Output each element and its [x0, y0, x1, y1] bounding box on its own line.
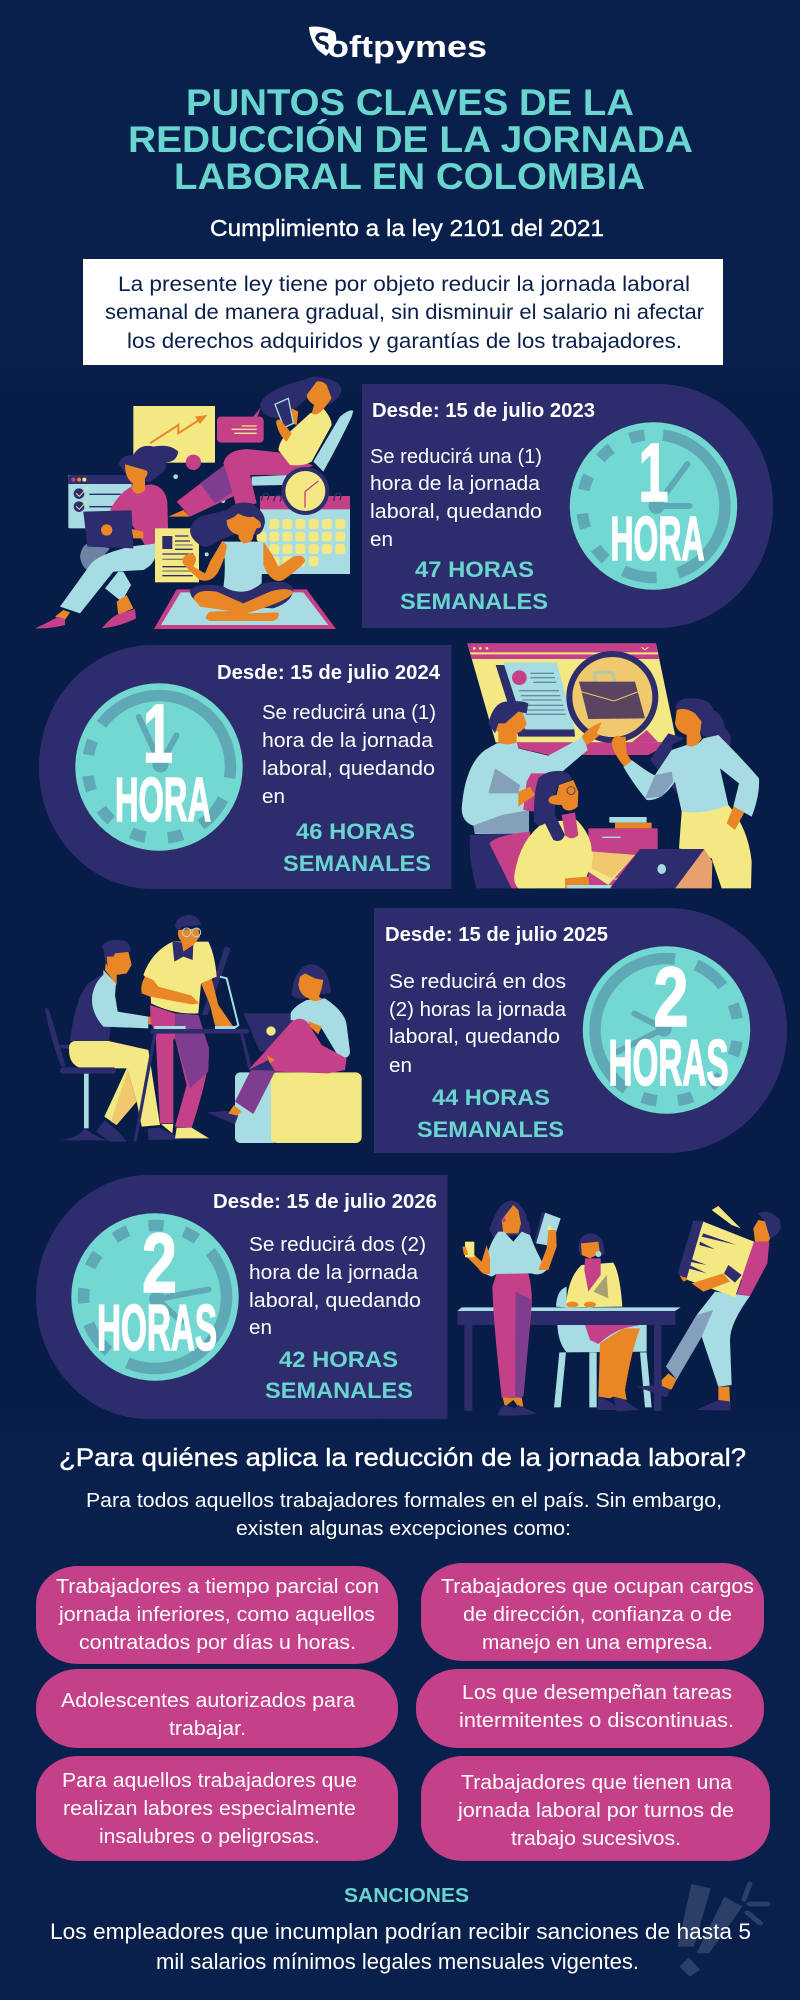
- description: (2) horas la jornada: [389, 999, 567, 1021]
- hours remaining: 46 HORAS: [296, 819, 415, 844]
- title: LABORAL EN COLOMBIA: [174, 156, 645, 197]
- pill: part time: Trabajadores a tiempo parcial con: [56, 1576, 379, 1598]
- pill: shift work: Trabajadores que tienen una: [461, 1772, 733, 1794]
- intro box: [83, 259, 723, 365]
- description: [389, 971, 567, 1077]
- icon: clock 2 horas: HORAS: [97, 1291, 217, 1364]
- sanctions text: [50, 1919, 751, 1974]
- hours remaining: SEMANALES: [283, 851, 431, 876]
- description: Se reducirá una (1): [370, 446, 542, 468]
- title: REDUCCIÓN DE LA JORNADA: [128, 118, 693, 160]
- description: en: [262, 786, 285, 808]
- hours remaining: SEMANALES: [417, 1117, 564, 1142]
- logo: Softpymes: oftpymes: [327, 29, 487, 64]
- pill: shift work: trabajo sucesivos.: [511, 1828, 681, 1850]
- pill: part time: [36, 1566, 398, 1664]
- pill: adolescents: Adolescentes autorizados para: [61, 1690, 356, 1712]
- hours remaining: 44 HORAS: [432, 1085, 550, 1110]
- icon: clock 1 hora: [570, 422, 737, 590]
- description: laboral, quedando: [389, 1026, 560, 1048]
- icon: exclamation marks: [678, 1883, 767, 1977]
- illustration: team around a magnifier and job screen: [462, 643, 759, 888]
- icon: clock 1 hora: HORA: [115, 766, 211, 835]
- description: [370, 446, 542, 551]
- intro text: Para todos aquellos trabajadores formales en el país. Sin embargo,: [86, 1490, 722, 1512]
- date: Desde: 15 de julio 2025: [385, 924, 608, 946]
- intro box: semanal de manera gradual, sin disminuir el salario ni afectar: [105, 301, 704, 324]
- icon: clock 2 horas: [41, 1183, 269, 1411]
- intro box: los derechos adquiridos y garantías de los trabajadores.: [127, 330, 682, 353]
- pill: adolescents: trabajar.: [169, 1718, 246, 1740]
- pill: unhealthy work: realizan labores especialmente: [63, 1798, 356, 1820]
- description: laboral, quedando: [249, 1290, 421, 1312]
- panel: 2025: [374, 908, 787, 1153]
- pill: shift work: jornada laboral por turnos de: [457, 1800, 734, 1822]
- panel: 2023: [362, 384, 773, 628]
- description: Se reducirá en dos: [389, 971, 566, 993]
- description: [262, 702, 436, 808]
- hours remaining: SEMANALES: [265, 1378, 413, 1403]
- hours remaining: [417, 1085, 564, 1142]
- pill: management: Trabajadores que ocupan cargos: [441, 1576, 754, 1598]
- description: hora de la jornada: [370, 473, 541, 495]
- date: Desde: 15 de julio 2024: [217, 662, 441, 684]
- sanctions text: Los empleadores que incumplan podrían recibir sanciones de hasta 5: [50, 1919, 751, 1944]
- date: Desde: 15 de julio 2026: [213, 1191, 437, 1213]
- icon: clock 1 hora: HORA: [610, 505, 704, 574]
- description: en: [389, 1055, 412, 1077]
- pill: intermittent tasks: Los que desempeñan tareas: [462, 1682, 732, 1704]
- title: PUNTOS CLAVES DE LA: [186, 82, 634, 123]
- intro text: [86, 1490, 722, 1540]
- description: hora de la jornada: [262, 730, 434, 752]
- pill: management: [421, 1563, 764, 1661]
- icon: clock 1 hora: 1: [143, 687, 173, 780]
- icon: clock 2 horas: [558, 921, 775, 1139]
- heading: sanctions: SANCIONES: [344, 1885, 469, 1907]
- date: Desde: 15 de julio 2023: [372, 400, 595, 422]
- pill: part time: contratados por días u horas.: [79, 1632, 356, 1654]
- pill: unhealthy work: Para aquellos trabajadores que: [62, 1770, 357, 1792]
- intro text: existen algunas excepciones como:: [236, 1518, 571, 1540]
- title: [128, 82, 693, 197]
- illustration: office workers at table with papers: [457, 1201, 781, 1416]
- pill: management: de dirección, confianza o de: [463, 1604, 732, 1626]
- pill: part time: jornada inferiores, como aquellos: [58, 1604, 375, 1626]
- pill: intermittent tasks: [416, 1669, 764, 1748]
- icon: clock 2 horas: 2: [142, 1216, 177, 1310]
- pill: intermittent tasks: intermitentes o discontinuas.: [459, 1710, 734, 1732]
- pill: unhealthy work: [36, 1756, 398, 1861]
- hours remaining: [400, 557, 548, 614]
- icon: clock 2 horas: 2: [654, 950, 688, 1044]
- description: Se reducirá dos (2): [249, 1234, 426, 1256]
- hours remaining: [283, 819, 431, 876]
- pill: shift work: [421, 1756, 770, 1861]
- hours remaining: SEMANALES: [400, 589, 548, 614]
- pill: unhealthy work: insalubres o peligrosas.: [99, 1826, 320, 1848]
- description: laboral, quedando: [370, 501, 542, 523]
- icon: clock 1 hora: [49, 657, 269, 877]
- hours remaining: 42 HORAS: [279, 1347, 398, 1372]
- sanctions text: mil salarios mínimos legales mensuales vigentes.: [156, 1949, 639, 1974]
- description: hora de la jornada: [249, 1262, 419, 1284]
- description: en: [370, 529, 393, 551]
- illustration: coworkers at desk and woman on block: [45, 915, 362, 1143]
- intro box: La presente ley tiene por objeto reducir la jornada laboral: [118, 273, 690, 296]
- pill: adolescents: [36, 1669, 398, 1748]
- description: en: [249, 1317, 272, 1339]
- hours remaining: [265, 1347, 413, 1403]
- illustration: woman with laptop, woman with tablet, meditating woman, calendar: [35, 377, 353, 629]
- icon: clock 1 hora: 1: [638, 426, 668, 519]
- panel: 2024: [39, 645, 452, 889]
- pill: management: manejo en una empresa.: [482, 1632, 713, 1654]
- description: [249, 1234, 426, 1339]
- description: Se reducirá una (1): [262, 702, 436, 724]
- subtitle: Cumplimiento a la ley 2101 del 2021: [210, 215, 604, 241]
- description: laboral, quedando: [262, 758, 435, 780]
- hours remaining: 47 HORAS: [415, 557, 534, 582]
- heading: who it applies to: ¿Para quiénes aplica la reducción de la jornada laboral?: [59, 1444, 746, 1472]
- panel: 2026: [36, 1175, 448, 1419]
